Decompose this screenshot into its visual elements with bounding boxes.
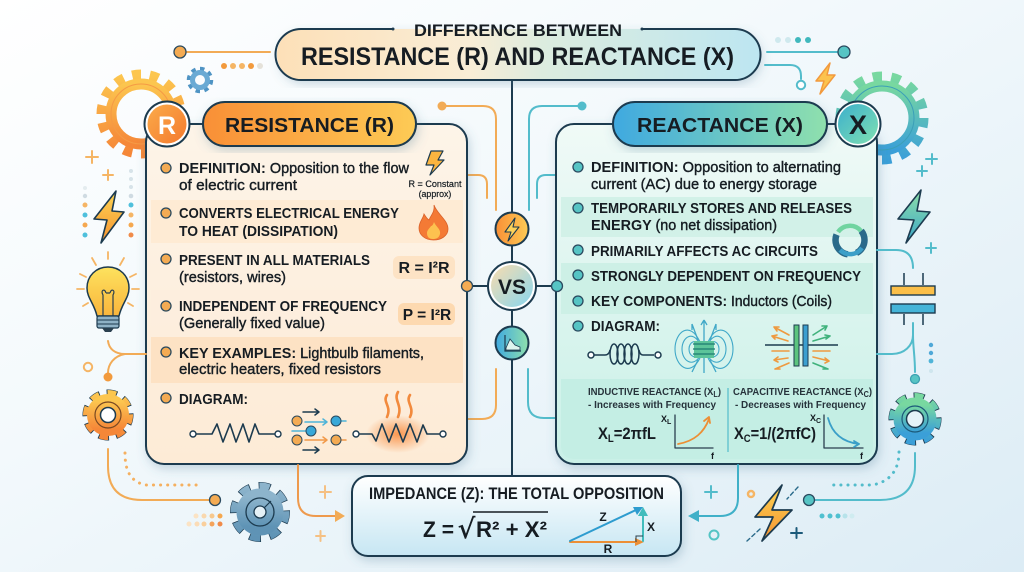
node: bottom centre chart [496, 326, 528, 360]
badge: X: X [849, 110, 867, 140]
formula: impedance: √ [458, 514, 476, 545]
chart: XC versus frequency [810, 413, 864, 461]
reactance text block: DEFINITION: Opposition to alternating [591, 159, 841, 176]
icon: lightbulb [77, 252, 139, 332]
formula: XL: L [608, 433, 614, 445]
icon: bolt with constant note [408, 151, 462, 199]
connector: top right teal wires [765, 37, 850, 89]
chart: XC versus frequency: C [816, 418, 821, 425]
diagram: inductor coil [588, 344, 661, 364]
heading: resistance pill: RESISTANCE (R) [225, 115, 394, 137]
resistance text block: of electric current [179, 177, 298, 194]
icon: right lightning bolt [898, 190, 930, 243]
resistance text block: DIAGRAM: [179, 391, 248, 408]
arrow: reactance to impedance [688, 465, 754, 540]
resistance text block: (Generally fixed value) [179, 315, 325, 332]
formula badge: R = I²R [393, 256, 455, 279]
formula: impedance: Z = [423, 517, 454, 542]
gear: right teal [893, 397, 937, 441]
icon: capacitor with wires [877, 250, 935, 384]
connector wires between panels and centre, teal [528, 102, 586, 418]
divider [727, 388, 729, 452]
panel: reactance [556, 124, 877, 464]
icon: small orange bolt [816, 63, 835, 94]
row bands [151, 200, 463, 383]
text: inductive reactance: INDUCTIVE REACTANCE (X [588, 386, 726, 398]
reactance text block: current (AC) due to energy storage [591, 176, 817, 193]
formula: XC: C [744, 433, 751, 445]
central divider line [511, 80, 513, 476]
chart: XL versus frequency [661, 414, 715, 461]
resistance text block: KEY EXAMPLES: Lightbulb filaments, [179, 345, 424, 362]
reactance text block: KEY COMPONENTS: Inductors (Coils) [591, 293, 832, 310]
formula badge: P = I²R: P = I²R [403, 307, 451, 324]
connector: bulb to gear wires [84, 341, 146, 382]
formula: XC: X [734, 424, 745, 443]
reactance text block: ENERGY (no net dissipation) [591, 217, 777, 234]
heading: reactance pill [613, 102, 836, 146]
icon: bottom right bolt [747, 485, 802, 541]
gear: small blue top [189, 69, 211, 91]
connector wires between panels and centre, orange [438, 102, 496, 419]
formula: XL: X [598, 424, 609, 443]
resistance text block: DEFINITION: Opposition to the flow [179, 160, 409, 177]
reactance text block: STRONGLY DEPENDENT ON FREQUENCY [591, 268, 861, 285]
heading: reactance pill: REACTANCE (X) [637, 115, 803, 137]
arrow: resistance to impedance [298, 465, 345, 541]
reactance text block: TEMPORARILY STORES AND RELEASES [591, 200, 852, 217]
diagram: impedance triangle: Z [599, 510, 607, 524]
row bands [561, 197, 873, 459]
text: capacitive reactance: C [864, 390, 869, 399]
resistance text block: TO HEAT (DISSIPATION) [179, 223, 338, 240]
node: VS [488, 262, 536, 310]
badge: X [836, 102, 880, 146]
formula: XC: =1/(2πfC) [751, 424, 816, 443]
title: DIFFERENCE BETWEEN [414, 22, 622, 40]
resistance text block: (resistors, wires) [179, 269, 286, 286]
diagram: electron flow [292, 409, 346, 453]
heading: resistance pill [190, 102, 416, 146]
formula: impedance [423, 512, 548, 545]
reactance bullets [573, 162, 583, 331]
icon: flame [419, 205, 448, 240]
text: inductive reactance: - Increases with Frequency [588, 399, 716, 411]
panel: impedance: IMPEDANCE (Z): THE TOTAL OPPOSITION [369, 484, 664, 503]
gear: bottom blue-grey [235, 487, 285, 537]
text: capacitive reactance: - Decreases with Frequency [735, 399, 866, 411]
badge: R: R [158, 112, 176, 140]
diagram: heated resistor [353, 392, 446, 453]
chart: XL versus frequency: L [667, 419, 672, 426]
reactance text block [591, 159, 861, 335]
formula badge: R = I²R: R = I²R [398, 260, 450, 277]
chart: XL versus frequency: f [711, 451, 715, 461]
text: inductive reactance: ) [718, 386, 721, 398]
reactance text block: PRIMARILY AFFECTS AC CIRCUITS [591, 243, 818, 260]
text: inductive reactance: L [713, 390, 718, 399]
badge: R [144, 102, 190, 146]
formula: XL: =2πfL [614, 424, 656, 443]
gear: left orange [87, 394, 129, 436]
diagram: impedance triangle: R [604, 542, 613, 556]
formula: impedance: R² + X² [476, 517, 547, 542]
diagram: impedance triangle: X [647, 520, 655, 534]
text: capacitive reactance: ) [869, 386, 872, 398]
chart: XC versus frequency: X [810, 413, 816, 423]
icon: bolt with constant note: R = Constant [408, 179, 462, 189]
resistance text block: electric heaters, fixed resistors [179, 361, 381, 378]
decor: left pluses and dots [82, 151, 134, 238]
resistance text block [179, 160, 424, 408]
node: VS: VS [498, 276, 526, 299]
connector: bottom right wire [804, 452, 915, 518]
node: top centre bolt [496, 212, 528, 246]
title [276, 22, 760, 80]
connector: top left orange wire [174, 46, 270, 69]
chart: XL versus frequency: X [661, 414, 667, 424]
decor: right pluses [917, 154, 937, 253]
gear: large orange top left [102, 75, 180, 153]
resistance text block: PRESENT IN ALL MATERIALS [179, 252, 370, 269]
diagram: impedance triangle [570, 507, 655, 556]
formula badge: P = I²R [398, 303, 455, 325]
icon: cycle arrows [836, 226, 864, 254]
diagram: resistor symbol [190, 424, 281, 442]
resistance text block: CONVERTS ELECTRICAL ENERGY [179, 205, 399, 222]
connector: panel links to VS [462, 280, 562, 292]
text: capacitive reactance [733, 386, 872, 411]
panel: resistance [146, 124, 467, 464]
text: capacitive reactance: CAPACITIVE REACTANCE (X [733, 386, 877, 398]
connector: bottom left wire [108, 449, 222, 526]
reactance text block: DIAGRAM: [591, 318, 660, 335]
chart: XC versus frequency: f [860, 451, 864, 461]
title: RESISTANCE (R) AND REACTANCE (X) [301, 43, 734, 71]
diagram: inductor magnetic field [675, 320, 733, 373]
panel: impedance [352, 476, 681, 556]
icon: bolt with constant note: (approx) [419, 189, 451, 199]
icon: left lightning bolt [94, 191, 124, 243]
gear: large teal top right [841, 77, 923, 159]
text: inductive reactance [588, 386, 721, 411]
resistance bullets [161, 163, 171, 403]
resistance text block: INDEPENDENT OF FREQUENCY [179, 298, 387, 315]
diagram: capacitor field [765, 325, 838, 369]
